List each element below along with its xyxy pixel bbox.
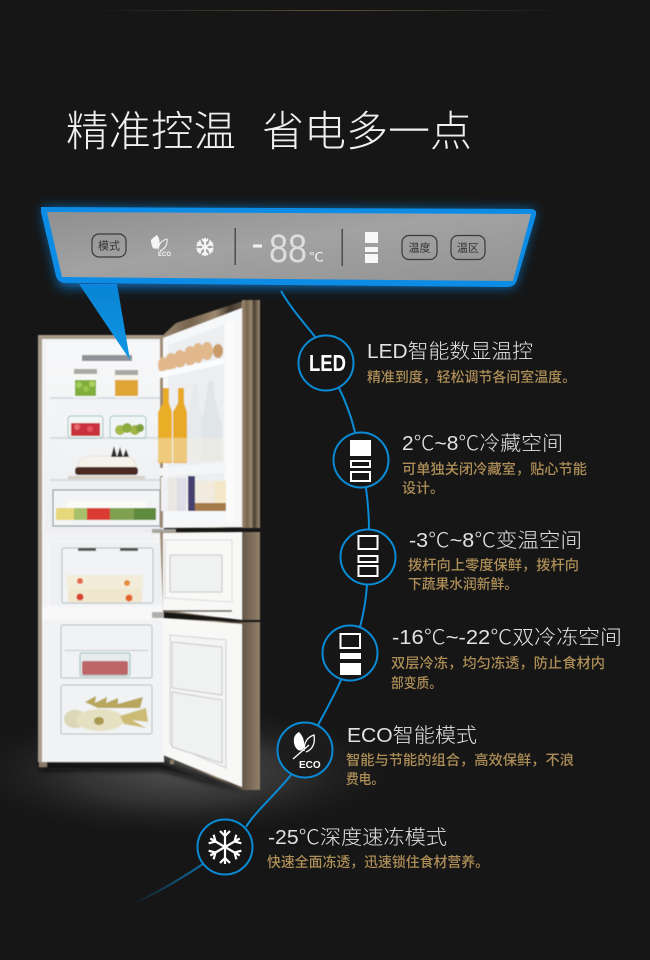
jar: pasta (114, 370, 139, 398)
description: 快速全面冻透，迅速锁住食材营养。 (267, 854, 489, 870)
panel dividers (234, 228, 343, 266)
icon: lower compartments (322, 626, 378, 680)
icon: snowflake (198, 820, 252, 874)
eggs (158, 342, 223, 373)
description: 拨杆向上零度保鲜，拨杆向 (408, 557, 579, 573)
temperature readout (253, 227, 324, 271)
heading: ECO智能模式 (347, 724, 477, 747)
fridge cabinet (38, 335, 164, 762)
description (346, 752, 574, 787)
mode button (92, 234, 126, 257)
title: 省电多一点 (262, 108, 472, 155)
middle compartment drawer (49, 542, 162, 606)
control panel (41, 207, 536, 287)
door shelf (160, 462, 225, 476)
description: 可单独关闭冷藏室，贴心节能 (402, 461, 587, 477)
panel face (47, 212, 531, 281)
panel frame (41, 207, 536, 287)
middle door (152, 532, 260, 620)
heading: -16℃~-22℃双冷冻空间 (392, 626, 622, 649)
snowflake icon (196, 238, 214, 256)
description (408, 557, 579, 592)
feature: deep freeze (198, 820, 489, 874)
description: 部变质。 (391, 675, 442, 691)
shelves (50, 397, 162, 481)
freezer drawer: meat (61, 625, 152, 678)
refrigerator (38, 300, 260, 792)
description: 双层冷冻，均匀冻透，防止食材内 (391, 655, 605, 671)
description: 智能与节能的组合，高效保鲜，不浪 (346, 752, 574, 768)
box: red fruit (68, 416, 103, 438)
jar: green grapes (73, 369, 98, 398)
description (402, 461, 587, 496)
milk boxes and jars (161, 477, 169, 511)
temperature button: 温度 (408, 240, 430, 254)
temperature readout: 88 (269, 227, 307, 271)
icon: LED (298, 336, 354, 390)
connector curve (130, 291, 369, 905)
title: 精准控温 (66, 108, 236, 155)
panel glow (42, 208, 535, 287)
icon: middle compartment (340, 530, 396, 584)
description: 下蔬果水润新鲜。 (408, 576, 518, 592)
description: 精准到度，轻松调节各间室温度。 (367, 369, 576, 385)
icon: ECO leaf (278, 722, 332, 778)
icon: top compartment (334, 432, 388, 488)
title (66, 108, 472, 155)
fridge control strip (82, 355, 132, 361)
heading: -3℃~8℃变温空间 (409, 529, 582, 552)
cake (68, 446, 145, 479)
mode button: 模式 (98, 240, 120, 252)
heading: 2℃~8℃冷藏空间 (402, 432, 563, 455)
fridge feet (39, 760, 174, 767)
blue callout beam (79, 284, 130, 360)
heading: LED智能数显温控 (367, 340, 533, 363)
box: green fruit (110, 416, 146, 438)
floor shadow (40, 762, 245, 792)
upper door (152, 300, 260, 533)
zone indicator (365, 232, 378, 263)
description: 设计。 (402, 480, 444, 496)
lower door (163, 618, 260, 790)
divider bar (42, 607, 163, 620)
icon: LED: LED (309, 350, 346, 376)
zone button: 温区 (457, 242, 479, 254)
handle (152, 529, 176, 533)
feature: refrigerated zone (334, 432, 587, 496)
temperature readout: ℃ (309, 250, 324, 264)
eco icon (151, 235, 171, 258)
freezer drawer: fish (61, 685, 152, 734)
crisper drawer (52, 481, 161, 526)
temperature button (402, 236, 437, 260)
bottles (158, 388, 172, 463)
description (391, 655, 605, 691)
feature: variable zone (340, 529, 582, 592)
zone button (451, 236, 485, 260)
eco icon: ECO (158, 252, 171, 258)
icon: ECO leaf: ECO (299, 760, 321, 771)
feature: ECO mode (278, 722, 574, 787)
heading: -25℃深度速冻模式 (268, 826, 447, 849)
feature: dual freezer (322, 626, 622, 691)
feature: LED (298, 336, 576, 390)
description: 费电。 (346, 771, 384, 787)
